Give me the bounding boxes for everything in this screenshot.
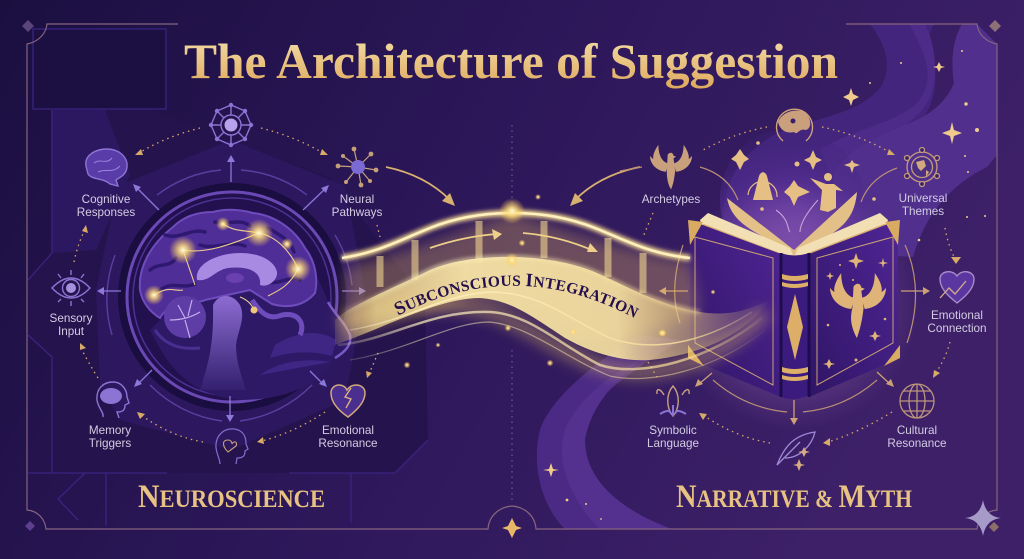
icon: feather (777, 432, 815, 471)
bridge and stream (332, 194, 772, 386)
golden pathways (154, 224, 298, 310)
top rail (342, 213, 690, 258)
ribbon (335, 257, 770, 360)
icon: broken heart (331, 385, 365, 417)
sparkles right (543, 50, 986, 520)
labels: neuroscience: Neural (340, 193, 374, 206)
labels: neuroscience: Sensory (50, 312, 93, 325)
labels: neuroscience: Memory (89, 424, 131, 437)
labels: neuroscience: Cognitive (82, 193, 130, 206)
head silhouette (150, 232, 350, 400)
labels: narrative: Themes (902, 205, 944, 218)
arrows into bridge (386, 167, 640, 206)
icon: universal globe (904, 148, 940, 186)
icon: globe (900, 384, 934, 418)
book halo (669, 180, 919, 430)
labels: neuroscience: Triggers (89, 437, 131, 450)
labels: neuroscience: Input (58, 325, 85, 338)
labels: neuroscience: Responses (77, 206, 135, 219)
icon: mythic circle (776, 109, 812, 141)
stars and figures above book (731, 141, 876, 212)
icon: neural node (336, 147, 378, 187)
spine ornaments (782, 274, 808, 381)
icon: network hub (209, 103, 253, 147)
bridge and stream: SUBCONSCIOUS INTEGRATION (394, 274, 640, 318)
bridge spark (499, 198, 525, 224)
bridge arrows (430, 229, 598, 252)
phoenix on cover (830, 273, 886, 338)
icon: fleur de lis (657, 386, 689, 416)
icon: eye (52, 270, 90, 306)
lower wisps (338, 292, 765, 379)
left radial arrows (97, 155, 366, 422)
labels: narrative: Universal (899, 192, 947, 205)
cover stars (823, 253, 888, 369)
narrative and myth heading: NARRATIVE & MYTH (676, 479, 912, 515)
labels: narrative: Cultural (897, 424, 937, 437)
labels: narrative: Emotional (931, 309, 983, 322)
outer ring arcs (107, 170, 352, 421)
labels: neuroscience: Emotional (322, 424, 374, 437)
icon: brain (86, 149, 127, 186)
centre dotted divider (511, 125, 513, 500)
dotted cycle arrows (74, 127, 955, 443)
dotted arrow heads (80, 149, 961, 446)
right radial arrows (659, 287, 930, 425)
bridge posts (380, 221, 643, 293)
ribbon underglow (340, 304, 765, 372)
brainstem (200, 296, 246, 390)
labels: narrative: Connection (927, 322, 987, 335)
particles (404, 194, 716, 368)
pages (727, 192, 857, 256)
labels: neuroscience: Pathways (332, 206, 382, 219)
labels: narrative: Symbolic (649, 424, 697, 437)
labels: neuroscience: Resonance (318, 437, 378, 450)
labels: narrative (642, 192, 987, 450)
ribbon top edge (345, 257, 700, 312)
icon: corner sparkle (965, 500, 1001, 536)
cerebrum (140, 210, 316, 318)
labels: narrative: Archetypes (642, 193, 700, 206)
left cover (690, 224, 781, 397)
smoke strands (776, 200, 818, 232)
left geometric backdrop (28, 29, 428, 526)
cerebellum (164, 296, 206, 338)
icon: phoenix archetype (650, 145, 692, 189)
arcs around book (620, 167, 916, 412)
neuroscience heading: NEUROSCIENCE (138, 479, 325, 515)
labels: narrative: Language (647, 437, 699, 450)
dark circle (118, 183, 346, 411)
icon: head with heart (216, 429, 248, 464)
labels: neuroscience (50, 193, 382, 450)
gold corners (688, 220, 900, 366)
bridge glow (345, 212, 700, 342)
labels: narrative: Resonance (887, 437, 947, 450)
right cover (809, 224, 898, 397)
title: The Architecture of Suggestion (184, 33, 838, 89)
glowing nodes (144, 217, 311, 314)
spine (781, 253, 809, 399)
panel: neuroscience brain (107, 170, 352, 421)
icon: emotional heart (940, 272, 974, 303)
panel: book (620, 141, 919, 430)
integration label (383, 286, 650, 327)
right swirling background (537, 24, 997, 529)
icon: memory head (97, 382, 129, 418)
